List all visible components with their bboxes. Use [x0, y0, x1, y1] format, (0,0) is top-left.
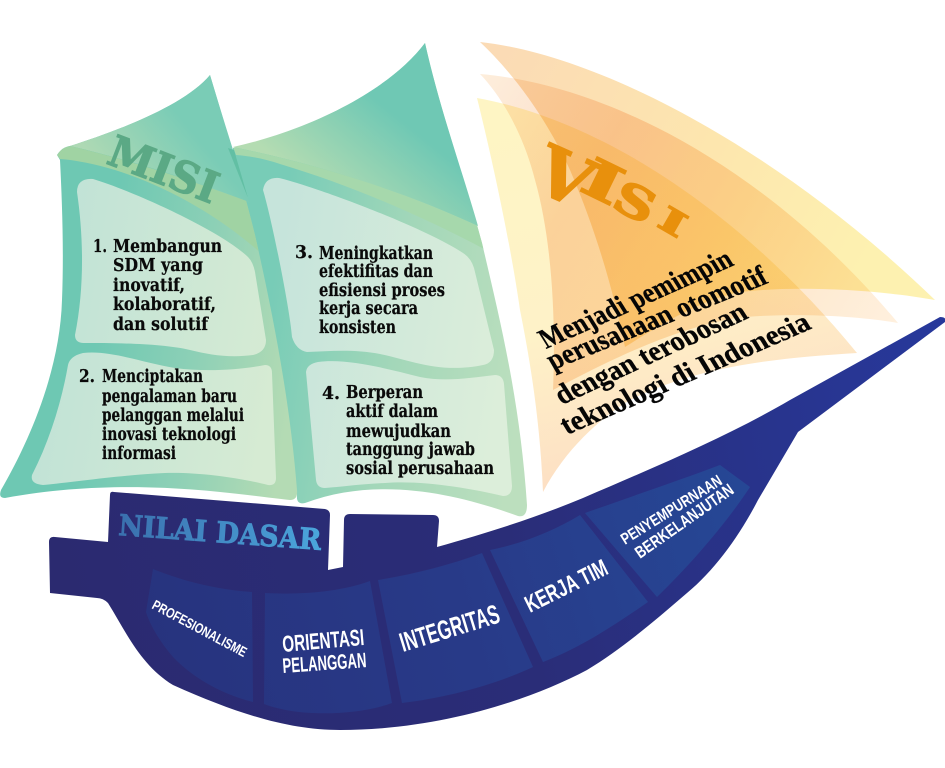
text: mission 2: Menciptakan — [102, 367, 203, 387]
text: mission 4: mewujudkan — [346, 422, 451, 442]
text: mission 4: 4. — [322, 384, 340, 404]
panel: mission 4 box — [306, 361, 512, 496]
text: mission 4: aktif dalam — [346, 402, 438, 422]
label: penyempurnaan berkelanjutan: BERKELANJUTAN — [631, 480, 737, 562]
label: integritas: INTEGRITAS — [396, 599, 503, 658]
heading: VISI: I — [572, 146, 634, 218]
panel: misi sail left — [0, 75, 297, 500]
text: vision statement: teknologi di Indonesia — [554, 307, 817, 441]
text: mission 4: Berperan — [346, 383, 423, 403]
text: vision statement: dengan terobosan — [548, 296, 753, 411]
text: mission 2: informasi — [102, 444, 176, 464]
text: mission 3: efektifitas dan — [319, 262, 433, 282]
text: mission 2: pengalaman baru — [102, 387, 237, 407]
text: mission 3: Meningkatkan — [319, 244, 433, 264]
panel: mission 2 box — [32, 353, 276, 485]
text: mission 2: 2. — [79, 367, 95, 387]
heading: VISI: V — [522, 130, 607, 226]
text: mission 3: 3. — [295, 243, 313, 263]
label: kerja tim: KERJA TIM — [521, 554, 612, 618]
text: vision statement — [533, 244, 817, 441]
label: orientasi pelanggan — [281, 624, 367, 678]
text: mission 1: inovatif, — [113, 276, 185, 296]
heading: NILAI DASAR: NILAI DASAR — [117, 508, 323, 557]
label: profesionalisme: PROFESIONALISME — [150, 597, 250, 660]
text: mission 4: sosial perusahaan — [346, 459, 494, 479]
text: mission 3 — [295, 243, 445, 338]
panel: visi sails — [477, 42, 935, 492]
panel: misi sail right — [233, 43, 527, 516]
text: vision statement: Menjadi pemimpin — [533, 244, 739, 355]
panel: value box 1 — [146, 569, 253, 702]
text: mission 1: SDM yang — [113, 256, 203, 276]
panel: mission 1 box — [75, 179, 266, 356]
text: mission 2: inovasi teknologi — [102, 425, 236, 445]
text: mission 1: Membangun — [113, 237, 222, 257]
label: penyempurnaan berkelanjutan: PENYEMPURNAAN — [618, 473, 725, 548]
panel: mission 3 box — [263, 178, 494, 368]
text: mission 3: konsisten — [319, 318, 396, 338]
heading: VISI: S — [605, 171, 665, 235]
panel: value box 5 — [585, 465, 750, 597]
heading: VISI — [522, 130, 694, 245]
panel: value box 2 — [264, 581, 392, 713]
text: mission 3: efisiensi proses — [319, 281, 445, 301]
heading: MISI: MISI — [101, 127, 225, 214]
panel: ship hull — [49, 317, 945, 730]
text: mission 2 — [79, 367, 244, 464]
text: mission 1 — [93, 237, 222, 335]
label: orientasi pelanggan: ORIENTASI — [281, 624, 365, 657]
text: mission 1: kolaboratif, — [113, 295, 216, 315]
text: mission 2: pelanggan melalui — [102, 406, 244, 426]
text: mission 1: 1. — [93, 237, 107, 257]
text: vision statement: perusahaan otomotif — [540, 260, 774, 376]
label: orientasi pelanggan: PELANGGAN — [282, 649, 367, 678]
text: mission 1: dan solutif — [113, 315, 209, 335]
panel: value box 3 — [378, 553, 533, 703]
text: mission 4: tanggung jawab — [346, 440, 475, 460]
panel: value box 4 — [490, 515, 648, 662]
heading: VISI: I — [652, 199, 694, 245]
label: penyempurnaan berkelanjutan — [618, 473, 737, 562]
text: mission 4 — [322, 383, 494, 479]
text: mission 3: kerja secara — [319, 299, 418, 319]
